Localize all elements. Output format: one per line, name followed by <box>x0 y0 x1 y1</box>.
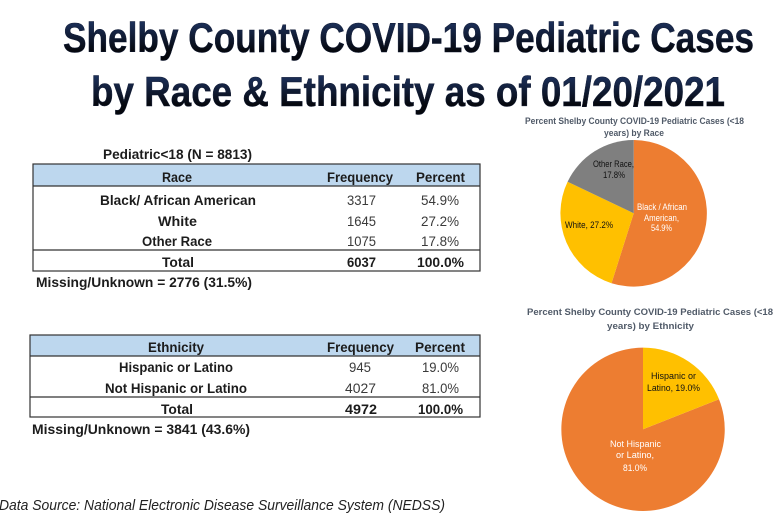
race table header text: Percent <box>416 170 465 185</box>
race table header text: Frequency <box>327 170 393 185</box>
race pie label: other race <box>593 159 634 180</box>
ethnicity table header band <box>30 335 480 356</box>
race pie label: other race: Other Race, <box>593 159 634 169</box>
table caption: pediatric total: Pediatric<18 (N = 8813) <box>103 147 252 162</box>
race row: White: 27.2% <box>421 214 459 229</box>
ethnicity missing note: Missing/Unknown = 3841 (43.6%) <box>32 422 250 437</box>
ethnicity pie title: Percent Shelby County COVID-19 Pediatric Cases (<18 <box>527 307 773 318</box>
ethnicity row: Total <box>161 402 463 417</box>
ethnicity table header text: Ethnicity <box>148 340 204 355</box>
race pie label: black / african american <box>637 202 687 233</box>
ethnicity row: Total: 100.0% <box>418 402 463 417</box>
panel: ethnicity table <box>30 335 480 437</box>
ethnicity table frame and rules <box>30 335 480 417</box>
panel: race table <box>33 147 480 290</box>
race pie slices <box>560 140 707 287</box>
ethnicity pie label: not hispanic or latino: 81.0% <box>623 463 647 473</box>
ethnicity pie title <box>527 307 773 332</box>
race table header band <box>33 164 480 186</box>
ethnicity row: Hispanic or Latino <box>119 360 459 375</box>
race row: Other Race: 1075 <box>347 234 376 249</box>
race table header text: Race <box>162 170 192 185</box>
race pie title: Percent Shelby County COVID-19 Pediatric Cases (<18 <box>525 116 744 127</box>
ethnicity row: Hispanic or Latino: 945 <box>349 360 371 375</box>
ethnicity pie label: hispanic or latino: Latino, 19.0% <box>647 383 700 393</box>
ethnicity row: Not Hispanic or Latino: Not Hispanic or Latino <box>105 381 247 396</box>
race pie label: other race: 17.8% <box>603 170 625 180</box>
race pie label: white: White, 27.2% <box>565 220 613 230</box>
race table frame and rules <box>33 164 480 271</box>
ethnicity row: Not Hispanic or Latino: 81.0% <box>422 381 459 396</box>
race row: Black / African American: 3317 <box>347 193 376 208</box>
race missing note: Missing/Unknown = 2776 (31.5%) <box>36 275 252 290</box>
race row: Other Race <box>142 234 459 249</box>
race pie title <box>525 116 744 139</box>
ethnicity pie title: years) by Ethnicity <box>607 321 695 332</box>
race row: Other Race: 17.8% <box>421 234 459 249</box>
race row: Total: 6037 <box>347 255 376 270</box>
race row: Total: 100.0% <box>417 255 464 270</box>
ethnicity pie label: hispanic or latino <box>647 371 700 393</box>
ethnicity row: Total: Total <box>161 402 193 417</box>
ethnicity table header text: Frequency <box>327 340 394 355</box>
panel: race pie chart <box>525 116 744 287</box>
ethnicity pie label: hispanic or latino: Hispanic or <box>651 371 696 381</box>
ethnicity row: Not Hispanic or Latino: 4027 <box>345 381 376 396</box>
ethnicity pie slices <box>561 348 725 511</box>
ethnicity table header text <box>148 340 466 355</box>
ethnicity pie label: not hispanic or latino: Not Hispanic <box>610 439 661 449</box>
race row: Black / African American: 54.9% <box>421 193 459 208</box>
ethnicity row: Hispanic or Latino: Hispanic or Latino <box>119 360 233 375</box>
race row: White: 1645 <box>347 214 376 229</box>
race row: Total <box>162 255 464 270</box>
panel: ethnicity pie chart <box>527 307 773 511</box>
title <box>63 14 754 115</box>
race row: Total: Total <box>162 255 194 270</box>
ethnicity table header text: Percent <box>415 340 466 355</box>
race row: Other Race: Other Race <box>142 234 212 249</box>
ethnicity pie label: not hispanic or latino: or Latino, <box>616 450 654 460</box>
ethnicity row: Not Hispanic or Latino <box>105 381 459 396</box>
race pie label: black / african american: 54.9% <box>651 223 672 233</box>
race row: White <box>158 214 459 229</box>
race row: White: White <box>158 214 198 229</box>
race pie label: black / african american: American, <box>644 213 679 223</box>
race pie title: years) by Race <box>604 128 664 139</box>
race table header text <box>162 170 465 185</box>
race row: Black / African American <box>100 193 459 208</box>
race pie label: black / african american: Black / African <box>637 202 687 212</box>
race row: Black / African American: Black/ African American <box>100 193 256 208</box>
ethnicity row: Total: 4972 <box>345 402 377 417</box>
ethnicity row: Hispanic or Latino: 19.0% <box>422 360 459 375</box>
ethnicity pie label: not hispanic or latino <box>610 439 661 473</box>
